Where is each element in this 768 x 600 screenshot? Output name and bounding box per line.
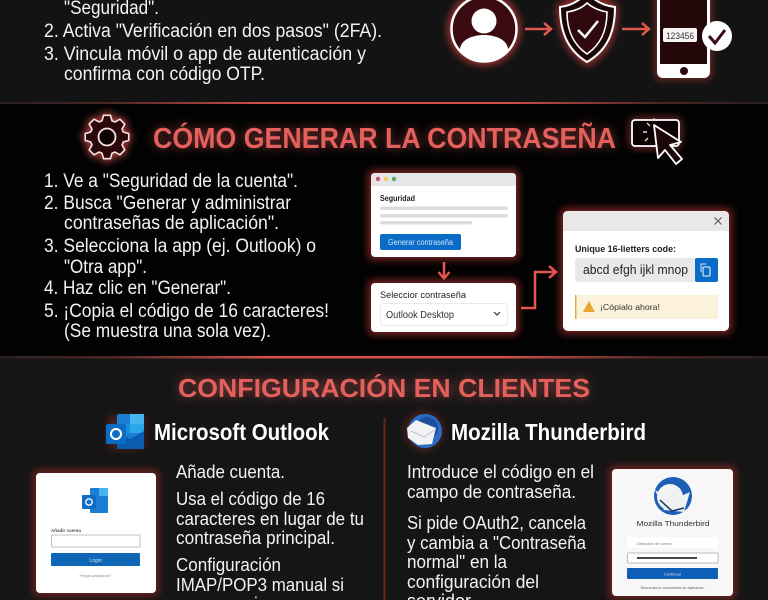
logo [82, 488, 108, 513]
text block: Thunderbird instructions: Introduce el código en el [407, 461, 594, 482]
arrow: elbow to code window [521, 266, 556, 308]
text block: 2FA steps: 3. Vincula móvil o app de autenticación y [44, 44, 366, 65]
text block: Outlook instructions: Configuración [176, 554, 281, 575]
icon: gear [85, 115, 129, 159]
text block: Outlook instructions: Usa el código de 16 [176, 488, 325, 509]
icon: user [451, 0, 517, 62]
panel: client configuration background [0, 357, 768, 600]
text block: 2FA steps: 2. Activa "Verificación en dos pasos" (2FA). [44, 21, 382, 42]
heading: generate password: CÓMO GENERAR LA CONTRASEÑA [153, 121, 616, 155]
warning callout: ¡Cópialo ahora! [600, 302, 660, 312]
text block: Outlook instructions: IMAP/POP3 manual si [176, 574, 344, 595]
card: Outlook login [33, 470, 159, 596]
text block: generate password steps: 2. Busca "Generar y administrar [44, 193, 292, 214]
arrow: down [438, 262, 450, 278]
card: Thunderbird login: Dirección de correo [637, 541, 672, 546]
code field [575, 258, 718, 282]
text block: Outlook instructions: caracteres en lugar de tu [176, 508, 364, 529]
text block: Thunderbird instructions: Si pide OAuth2, cancela [407, 512, 587, 533]
heading: client configuration: CONFIGURACIÓN EN CLIENTES [178, 373, 590, 403]
warning callout [575, 295, 718, 319]
text block: 2FA steps: confirma con código OTP. [64, 64, 265, 85]
text block: Thunderbird instructions: y cambia a "Contraseña [407, 532, 587, 553]
text block: generate password steps: contraseñas de aplicación". [64, 213, 279, 234]
card: unique code window: Unique 16-lietters code: [575, 244, 676, 255]
card: Outlook login: Login [89, 558, 102, 564]
code field: abcd efgh ijkl mnop [583, 262, 688, 277]
text block: Thunderbird instructions: campo de contraseña. [407, 481, 576, 502]
card: security window: Seguridad [380, 193, 415, 203]
text block: 2FA steps [44, 0, 382, 85]
card: Thunderbird login: Continuar [664, 572, 682, 576]
heading: Mozilla Thunderbird: Mozilla Thunderbird [451, 419, 646, 445]
text block: generate password steps: (Se muestra una sola vez). [64, 321, 271, 342]
text block: generate password steps: "Otra app". [64, 257, 147, 278]
text block: generate password steps: 3. Selecciona la app (ej. Outlook) o [44, 236, 316, 257]
text block: Outlook instructions [176, 461, 364, 600]
divider: columns [384, 418, 386, 600]
text block: Thunderbird instructions [407, 461, 594, 600]
panel: generate password background [0, 103, 768, 357]
card: Thunderbird login [609, 466, 736, 599]
arrow: shield to phone [622, 23, 649, 35]
icon: shield [560, 0, 615, 63]
divider: section two [0, 356, 768, 358]
logo [654, 477, 692, 515]
text block: generate password steps [44, 171, 329, 342]
card: select password: Seleccior contraseña [380, 290, 467, 301]
text block: generate password steps: 4. Haz clic en "Generar". [44, 278, 231, 299]
check badge [702, 21, 732, 51]
icon: Outlook [106, 414, 144, 449]
code box: 123456 [666, 31, 694, 41]
card: select password: Outlook Desktop [386, 310, 454, 321]
card: Outlook login: Añadir cuenta [51, 528, 82, 533]
icon: Thunderbird [405, 412, 443, 450]
text block: Thunderbird instructions: configuración del [407, 571, 539, 592]
heading: Microsoft Outlook: Microsoft Outlook [154, 419, 329, 445]
card: Thunderbird login: Mozilla Thunderbird [636, 519, 710, 528]
panel: activate 2FA background [0, 0, 768, 103]
icon: phone with code [655, 0, 732, 80]
text block: generate password steps: 5. ¡Copia el código de 16 caracteres! [44, 301, 329, 322]
card: unique code window [560, 208, 732, 334]
text block: Outlook instructions: Añade cuenta. [176, 461, 285, 482]
card: Thunderbird login: Recuerda tu contraseña de aplicación [641, 586, 704, 590]
card: Outlook login: Forgot password? [79, 573, 112, 578]
button: generate: Generar contraseña [388, 238, 453, 247]
card: security window [368, 170, 519, 260]
button: generate [380, 234, 461, 250]
arrow: user to shield [525, 23, 551, 35]
card: select password [368, 280, 519, 335]
divider: section one [0, 102, 768, 104]
text block: generate password steps: 1. Ve a "Seguridad de la cuenta". [44, 171, 298, 192]
heading: generate password: CÓMO GENERAR LA CONTRASEÑA [153, 121, 616, 155]
text block: Outlook instructions: contraseña principal. [176, 527, 335, 548]
text block: Thunderbird instructions: normal" en la [407, 551, 508, 572]
heading: client configuration: CONFIGURACIÓN EN CLIENTES [178, 373, 590, 403]
icon: click cursor [632, 118, 682, 164]
